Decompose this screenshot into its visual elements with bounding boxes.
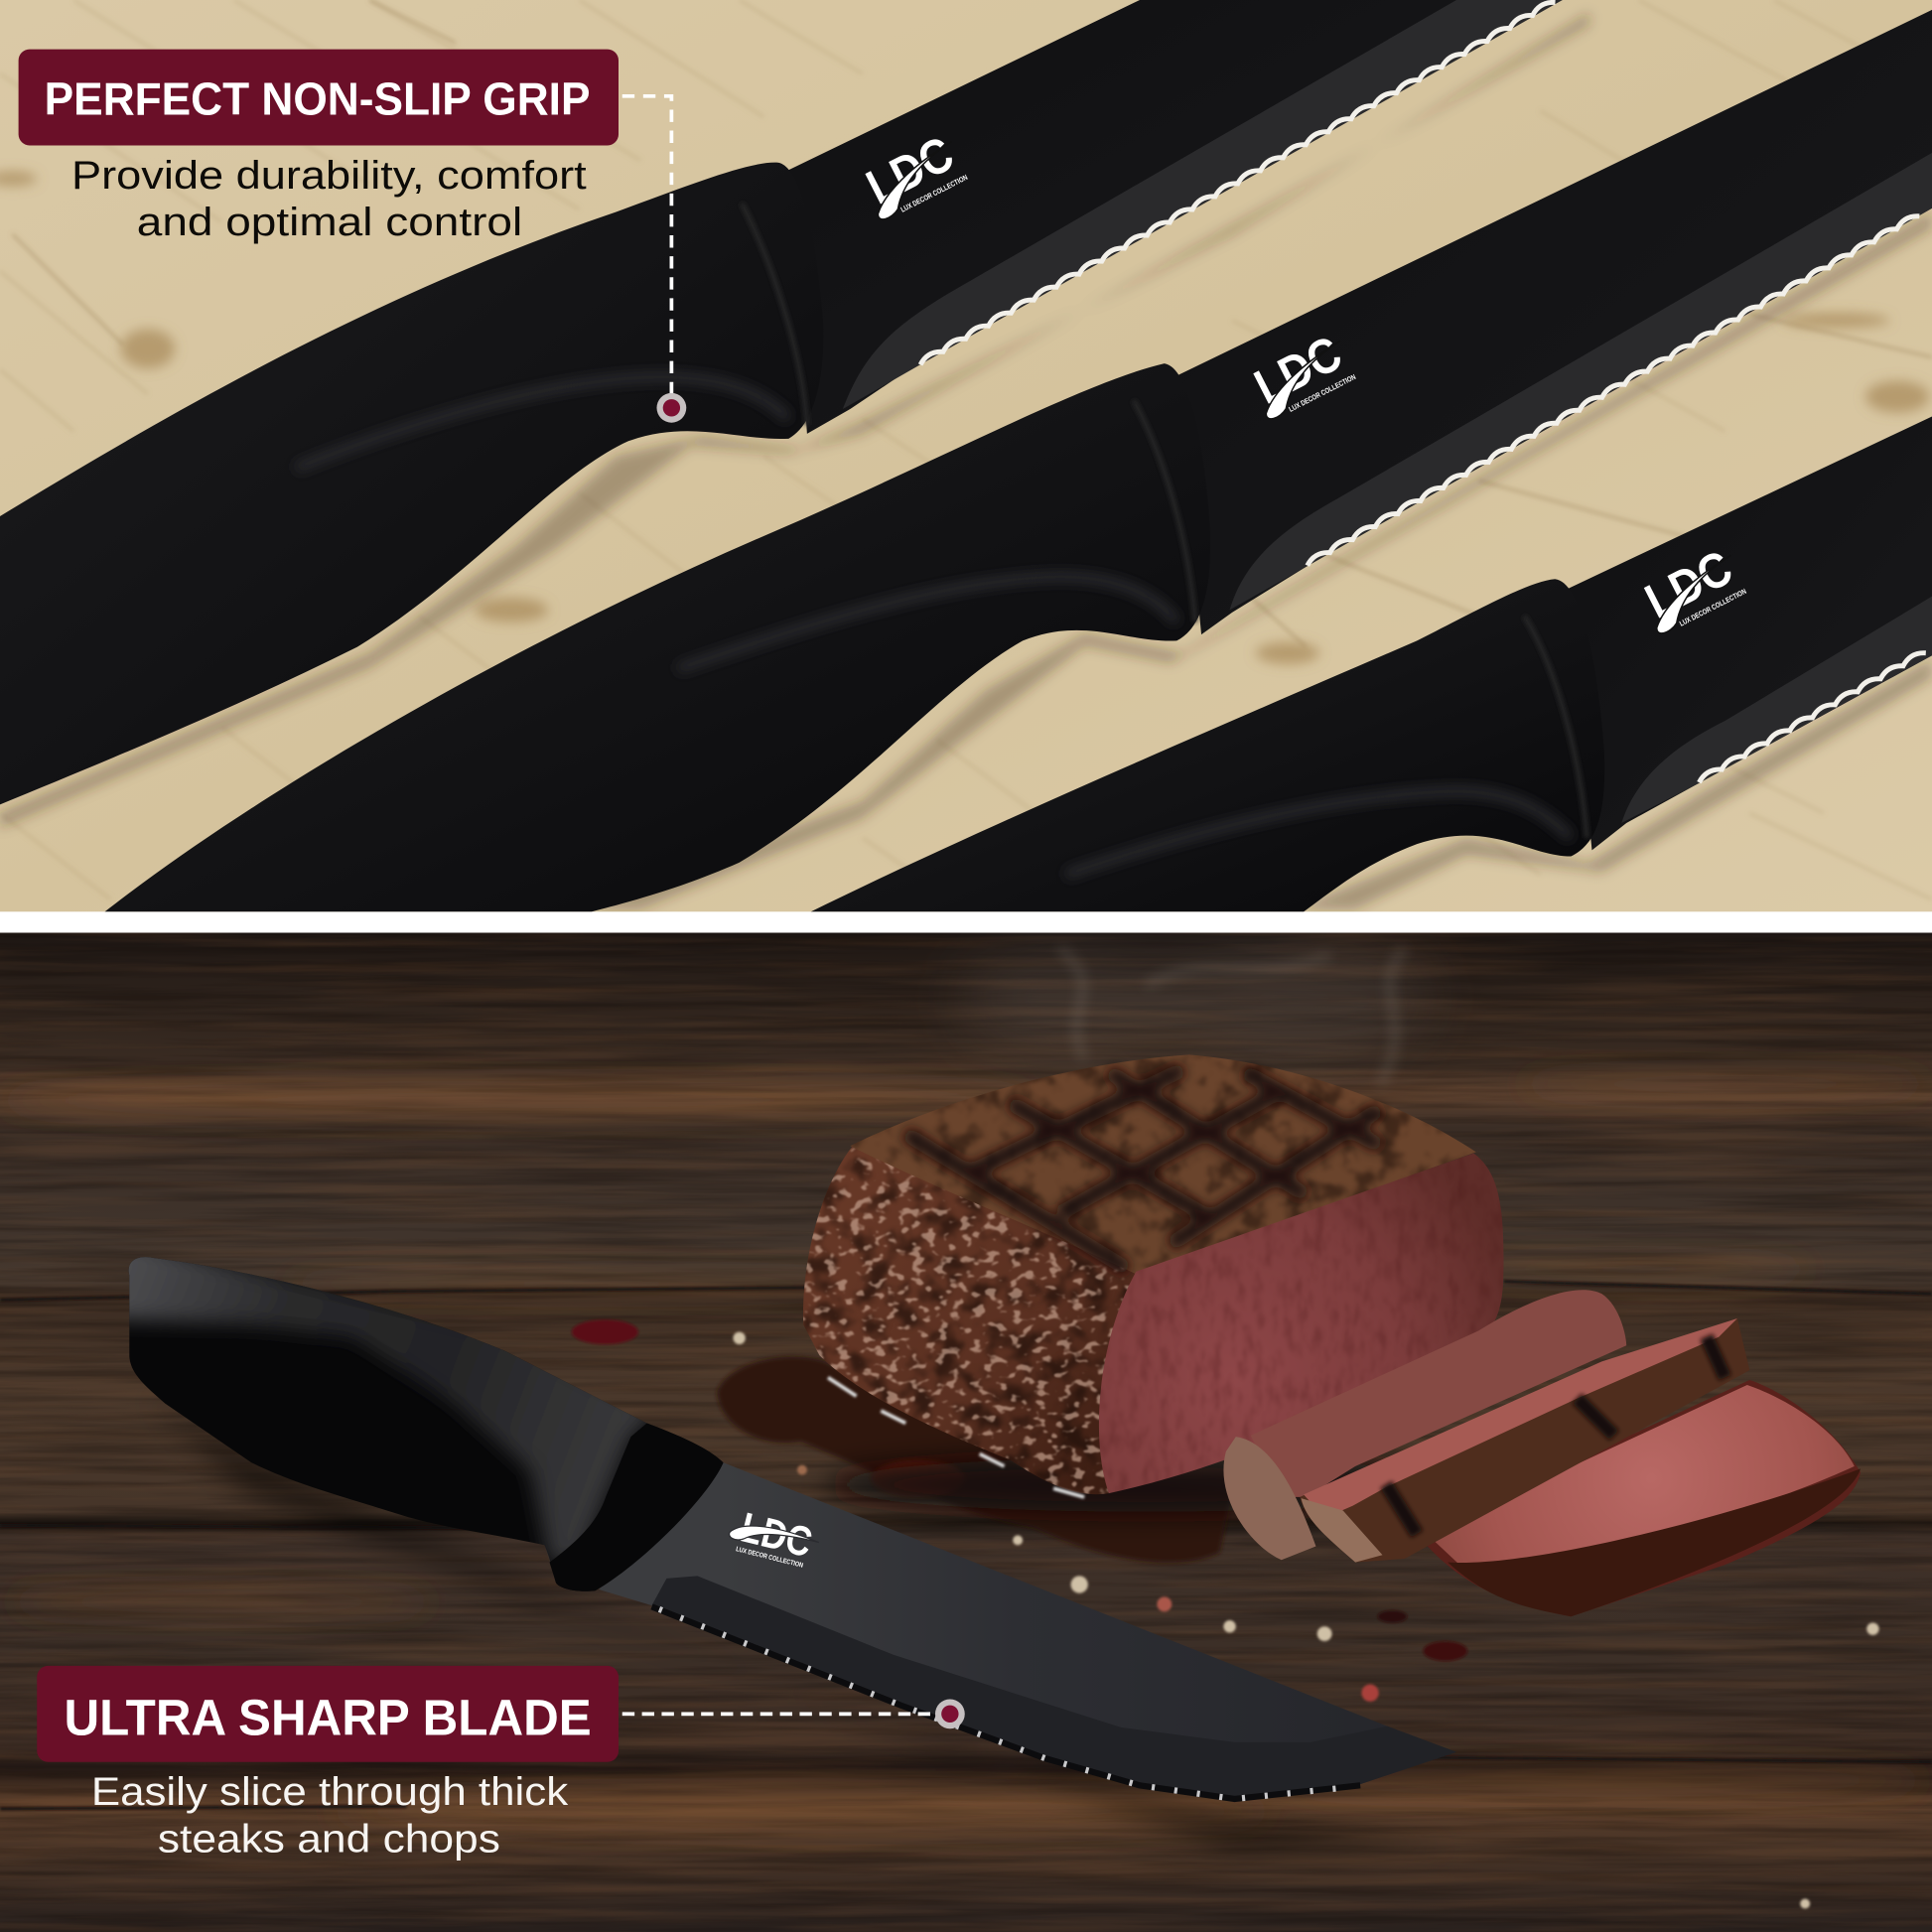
serrated edge 3 bbox=[1699, 653, 1926, 782]
fat glints along base bbox=[828, 1378, 1084, 1497]
callout: perfect non-slip grip bbox=[19, 50, 686, 423]
handle 2 highlight bbox=[678, 577, 1176, 669]
steam bbox=[961, 936, 1430, 1084]
knife 2 bbox=[104, 10, 1932, 911]
slice 2 char marks bbox=[1386, 1337, 1725, 1534]
bevel 3 bbox=[1621, 597, 1932, 823]
crust top bbox=[850, 1054, 1476, 1274]
dark wood surface bbox=[0, 932, 1932, 1932]
slice end bbox=[1223, 1437, 1315, 1560]
logo: LDC on blade: LUX DECOR COLLECTION bbox=[735, 1546, 804, 1570]
logo: LDC on knife 2: LDC bbox=[1246, 325, 1350, 415]
handle bbox=[129, 1257, 724, 1591]
logo: LDC on knife 1: LUX DECOR COLLECTION bbox=[899, 173, 969, 214]
logo: LDC on knife 1: LDC bbox=[858, 125, 962, 215]
handle bolster bbox=[550, 1423, 724, 1591]
slice 1 bbox=[1251, 1290, 1626, 1497]
knife 3 bbox=[811, 416, 1932, 911]
handle lit surface bbox=[98, 1232, 659, 1563]
steak: whole roast bbox=[803, 1054, 1504, 1512]
slice 3 bbox=[1417, 1380, 1861, 1616]
serrated edge 1 bbox=[920, 2, 1555, 364]
knife shadow bbox=[148, 1392, 1453, 1849]
panel: wooden board with three knives bbox=[0, 0, 1932, 911]
knife 1 bbox=[0, 0, 1563, 804]
knife shadows bbox=[0, 12, 1932, 909]
handle 3 highlight bbox=[1066, 791, 1571, 875]
blade 3 bbox=[1568, 416, 1932, 850]
steak shadow bbox=[826, 1457, 1466, 1512]
serrated edge 2 bbox=[1308, 216, 1919, 566]
meat juices on board bbox=[572, 1319, 1467, 1661]
callout: ultra sharp blade bbox=[37, 1666, 965, 1861]
heading badge bbox=[37, 1666, 619, 1762]
description bbox=[91, 1770, 568, 1861]
slice 3 crust bbox=[1448, 1468, 1861, 1616]
cut face bbox=[1099, 1154, 1504, 1493]
blade bevel 1 bbox=[843, 0, 1563, 409]
steak slices bbox=[1223, 1290, 1861, 1616]
blade 1 bbox=[788, 0, 1563, 434]
handle 1 bbox=[0, 163, 823, 804]
blade bbox=[599, 1462, 1456, 1798]
handle 1 highlight bbox=[296, 377, 788, 469]
crust side bbox=[803, 1146, 1136, 1494]
wood surface bbox=[0, 0, 1932, 911]
heading badge: PERFECT NON-SLIP GRIP bbox=[45, 72, 590, 124]
logo: LDC on blade: LDC bbox=[736, 1503, 817, 1566]
description: Provide durability, comfort bbox=[71, 154, 587, 198]
description: steaks and chops bbox=[158, 1817, 500, 1861]
logo: LDC on knife 3: LDC bbox=[1636, 539, 1740, 629]
description: and optimal control bbox=[137, 201, 522, 244]
knife on wood bbox=[98, 1232, 1456, 1849]
description bbox=[71, 154, 587, 244]
blade 2 bbox=[1176, 10, 1932, 634]
handle 3 bbox=[811, 579, 1604, 911]
connector with marker bbox=[622, 96, 686, 423]
panel: steak on dark wood with knife bbox=[0, 932, 1932, 1932]
blade bevel bbox=[652, 1576, 1456, 1798]
peppercorn specks bbox=[733, 1332, 1879, 1908]
logo: LDC on knife 3: LUX DECOR COLLECTION bbox=[1678, 587, 1747, 628]
slice 2 bbox=[1300, 1318, 1749, 1563]
connector with marker bbox=[622, 1699, 965, 1728]
serrated edge bbox=[652, 1606, 1360, 1799]
handle 2 bbox=[104, 363, 1210, 911]
bevel 2 bbox=[1230, 153, 1932, 610]
slice 2 end bbox=[1302, 1498, 1382, 1563]
logo: LDC on knife 2: LUX DECOR COLLECTION bbox=[1288, 372, 1357, 414]
slice 2 pink surface bbox=[1304, 1318, 1737, 1518]
grill marks bbox=[905, 1069, 1380, 1269]
heading badge: ULTRA SHARP BLADE bbox=[65, 1689, 592, 1745]
slice 3 pink surface bbox=[1427, 1385, 1855, 1571]
description: Easily slice through thick bbox=[91, 1770, 568, 1814]
heading badge bbox=[19, 50, 619, 145]
